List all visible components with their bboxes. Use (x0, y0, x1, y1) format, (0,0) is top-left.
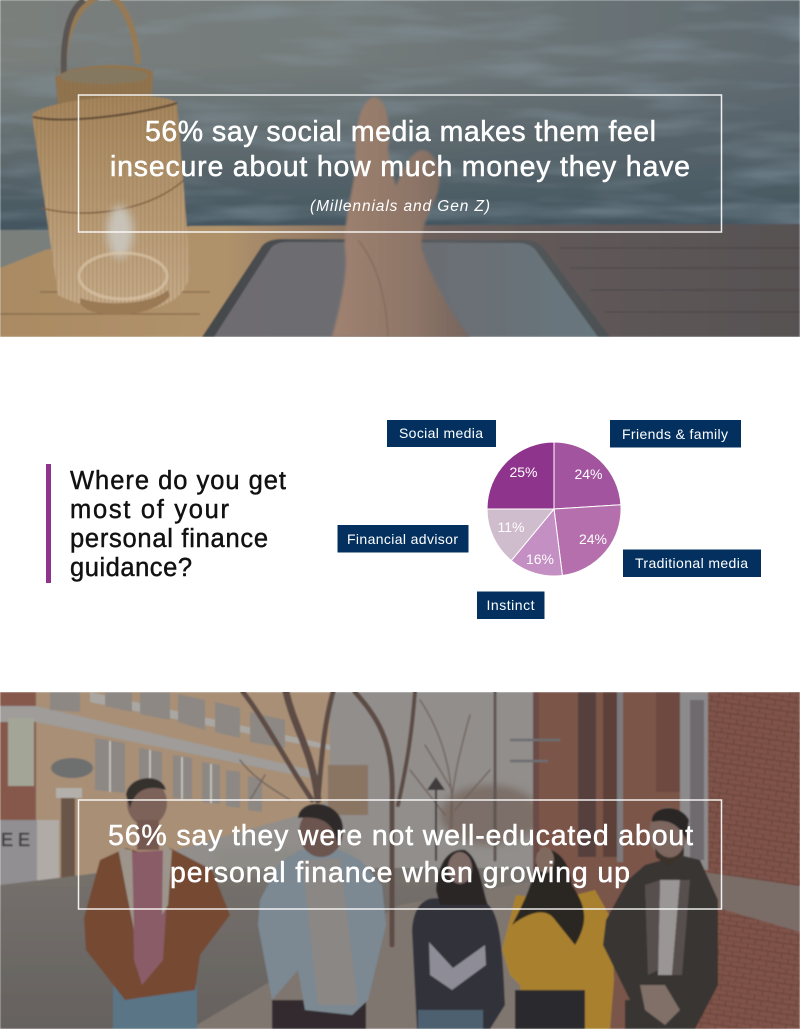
slice: traditional media 24% (554, 505, 621, 576)
slice: social media 25% (487, 442, 554, 509)
headline (110, 116, 690, 183)
panel: street photo with education statistic (0, 692, 800, 1029)
label: social media (387, 420, 496, 447)
slice: friends and family 24% (554, 442, 621, 509)
pie chart (487, 442, 621, 576)
chaise lounge (202, 239, 610, 337)
headline: 56% say social media makes them feel (145, 116, 656, 148)
headline: 56% say they were not well-educated about (108, 820, 693, 852)
heading: guidance? (70, 554, 192, 582)
heading: personal finance (70, 525, 268, 553)
panel: lantern photo with social media statistic (0, 0, 800, 337)
callout box (78, 95, 722, 232)
person: dark jacket (603, 807, 718, 1029)
heading (70, 467, 286, 582)
left building: E E (1, 830, 30, 850)
slice: financial advisor 11% (487, 509, 554, 561)
label: instinct (477, 592, 544, 619)
feet and legs (332, 97, 470, 337)
slice: instinct 16% (511, 509, 562, 576)
heading: Where do you get (70, 467, 286, 495)
label: traditional media: Traditional media (635, 555, 748, 571)
person: denim jacket (258, 804, 386, 1029)
headline (108, 820, 693, 889)
heading: most of your (70, 496, 230, 524)
person: brown jacket (84, 778, 230, 1029)
label: financial advisor (338, 525, 468, 552)
pie values: 11% (498, 519, 524, 535)
label: financial advisor: Financial advisor (347, 531, 458, 547)
road and sidewalk (0, 868, 530, 1029)
label: friends and family: Friends & family (622, 426, 728, 442)
pie values: 25% (509, 464, 538, 480)
bare trees (240, 692, 495, 945)
pie values: 24% (579, 531, 607, 547)
accent bar (46, 464, 51, 583)
person: woman in yellow sweater (502, 847, 614, 1029)
icon: lantern (32, 0, 190, 315)
background distant building (328, 765, 368, 815)
person: laughing woman in black sweater (412, 850, 505, 1029)
wooden deck (0, 224, 800, 337)
label: instinct: Instinct (486, 597, 535, 613)
left building (0, 692, 330, 890)
subtitle: (Millennials and Gen Z) (310, 198, 490, 215)
label: friends and family (610, 420, 741, 448)
headline: insecure about how much money they have (110, 151, 690, 183)
pie values: 16% (526, 551, 554, 567)
headline: personal finance when growing up (170, 857, 630, 889)
panel: personal finance guidance (46, 420, 761, 619)
label: social media: Social media (399, 425, 483, 441)
right buildings (510, 692, 800, 1029)
pie values: 24% (574, 466, 603, 482)
label: traditional media (623, 550, 761, 577)
callout box (78, 800, 722, 909)
pie values (498, 464, 607, 567)
